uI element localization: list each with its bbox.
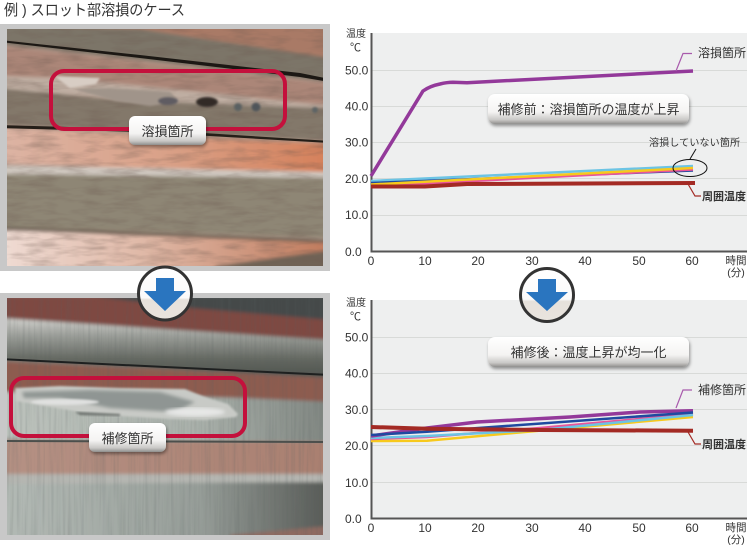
callout: undamaged areas: 溶損していない箇所 — [649, 136, 740, 149]
photo: repaired slot — [0, 296, 330, 540]
y axis labels: ℃ — [350, 42, 361, 54]
x axis labels: 40 — [578, 254, 592, 268]
leader: melted area — [676, 45, 746, 71]
panel: photo after repair — [0, 293, 330, 540]
x axis labels: 40 — [578, 521, 592, 535]
leader: repaired area — [676, 382, 746, 408]
line: melted area — [371, 71, 693, 176]
x axis labels — [368, 254, 746, 279]
title: 例 ) スロット部溶損のケース — [4, 2, 185, 19]
melted streak and pits — [54, 76, 318, 113]
y axis labels: 0.0 — [345, 245, 362, 259]
line: ambient temperature — [371, 427, 693, 431]
x axis labels: (分) — [727, 534, 745, 546]
highlight frame: repaired area — [11, 378, 245, 436]
lines: comparison points — [371, 414, 693, 441]
y axis labels: 10.0 — [345, 476, 369, 490]
x axis labels: 30 — [525, 254, 539, 268]
chart: temperature before repair — [345, 27, 747, 279]
leader: repaired area: 補修箇所 — [698, 382, 746, 397]
photo: melted slot — [0, 24, 330, 275]
x axis labels: 60 — [685, 521, 699, 535]
surface texture — [7, 298, 323, 535]
line: blue measurement — [371, 412, 693, 435]
label: melted area — [129, 116, 206, 145]
line: ambient temperature — [371, 183, 695, 186]
x axis labels: 時間 — [726, 522, 746, 534]
y axis labels: 40.0 — [345, 100, 369, 114]
label: repaired area: 補修箇所 — [101, 431, 154, 446]
line: repaired area — [371, 411, 693, 436]
callout: before repair — [488, 94, 689, 124]
leader: ambient temperature: 周囲温度 — [702, 189, 746, 203]
x axis labels: 20 — [471, 521, 485, 535]
x axis labels — [368, 521, 746, 546]
leader: ambient temperature — [688, 432, 746, 451]
leader: melted area: 溶損箇所 — [698, 45, 746, 60]
icon: down arrow between charts — [520, 268, 574, 322]
y axis labels — [345, 296, 369, 526]
y axis labels: 50.0 — [345, 330, 369, 344]
label: repaired area — [89, 423, 166, 452]
x axis labels: 10 — [418, 521, 432, 535]
y axis labels: 30.0 — [345, 136, 369, 150]
y axis labels: ℃ — [350, 311, 361, 323]
x axis labels: (分) — [727, 267, 745, 279]
x axis labels: 60 — [685, 254, 699, 268]
callout: undamaged areas — [649, 136, 740, 176]
surface texture — [7, 29, 323, 266]
callout: after repair — [488, 337, 689, 367]
y axis labels: 20.0 — [345, 439, 369, 453]
x axis labels: 50 — [632, 254, 646, 268]
callout: before repair: 補修前：溶損箇所の温度が上昇 — [497, 102, 680, 117]
repair weld — [15, 386, 238, 420]
x axis labels: 時間 — [726, 255, 746, 267]
y axis labels: 20.0 — [345, 172, 369, 186]
x axis labels: 30 — [525, 521, 539, 535]
x axis labels: 20 — [471, 254, 485, 268]
x axis labels: 10 — [418, 254, 432, 268]
panel: photo before repair — [0, 24, 330, 275]
line: undamaged areas — [371, 166, 693, 186]
x axis labels: 50 — [632, 521, 646, 535]
y axis labels: 温度 — [346, 296, 366, 309]
chart: temperature after repair — [345, 296, 747, 546]
y axis labels: 0.0 — [345, 512, 362, 526]
y axis labels: 30.0 — [345, 403, 369, 417]
leader: ambient temperature — [688, 184, 746, 203]
y axis labels: 40.0 — [345, 366, 369, 380]
highlight frame: melted area — [51, 71, 285, 129]
y axis labels: 10.0 — [345, 208, 369, 222]
x axis labels: 0 — [368, 254, 375, 268]
icon: down arrow between photos — [138, 267, 192, 320]
y axis labels — [345, 27, 369, 259]
y axis labels: 温度 — [346, 27, 366, 40]
x axis labels: 0 — [368, 521, 375, 535]
callout: after repair: 補修後：温度上昇が均一化 — [510, 345, 667, 360]
y axis labels: 50.0 — [345, 64, 369, 78]
label: melted area: 溶損箇所 — [141, 124, 194, 139]
leader: ambient temperature: 周囲温度 — [702, 437, 746, 451]
